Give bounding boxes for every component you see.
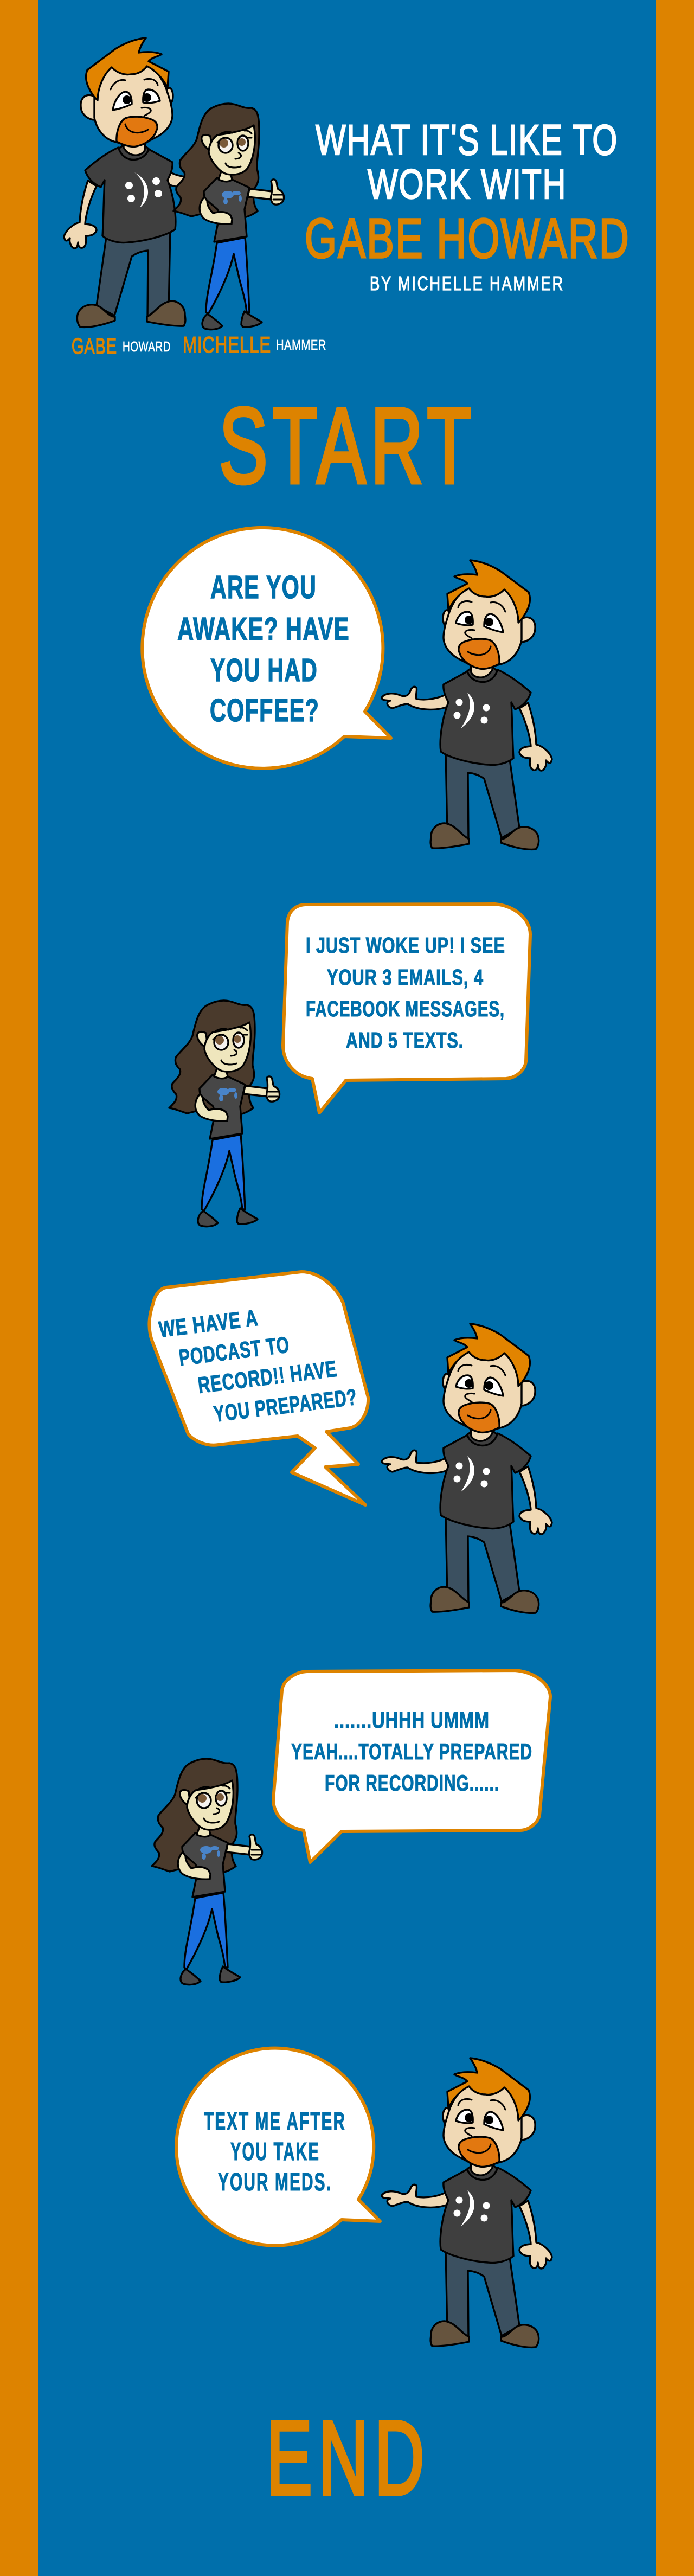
speech bubble 2: I JUST WOKE UP! I SEE [306,933,505,958]
header illustration: Gabe [64,38,234,327]
Gabe character 3 [382,2058,552,2347]
speech bubble 3: YOU PREPARED? [212,1384,358,1427]
Gabe character 2 [382,1324,552,1613]
START heading: START [219,386,477,505]
speech bubble 5: TEXT ME AFTER [204,2107,346,2135]
speech bubble 4 [273,1670,550,1862]
title: WORK WITH [368,161,567,208]
speech bubble 5 [176,2048,380,2246]
Michelle character 1 [169,1001,280,1227]
Michelle character 2 [152,1759,262,1985]
speech bubble 1: YOU HAD [210,652,318,688]
speech bubble 2 [283,904,530,1113]
caption: Gabe Howard: HOWARD [123,338,171,355]
title: BY MICHELLE HAMMER [370,272,564,294]
speech bubble 3: WE HAVE A [157,1305,260,1342]
speech bubble 4: .......UHHH UMMM [334,1707,490,1733]
left orange band [0,0,38,2576]
speech bubble 1: COFFEE? [210,693,319,728]
speech bubble 2: AND 5 TEXTS. [346,1028,464,1053]
speech bubble 3: PODCAST TO [177,1331,291,1370]
speech bubble 4: YEAH....TOTALLY PREPARED [291,1739,532,1764]
caption: Michelle Hammer: HAMMER [276,337,326,353]
speech bubble 4: FOR RECORDING...... [325,1770,499,1796]
speech bubble 2: YOUR 3 EMAILS, 4 [327,965,484,990]
caption: Michelle Hammer: MICHELLE [183,332,271,357]
caption: Gabe Howard: GABE [72,334,117,358]
speech bubble 3: RECORD!! HAVE [196,1356,338,1398]
END heading: END [266,2399,430,2517]
right orange band [656,0,694,2576]
speech bubble 5: YOU TAKE [230,2137,320,2165]
Gabe character 1 [382,560,552,849]
caption: Gabe Howard [72,334,171,358]
speech bubble 1: ARE YOU [210,569,317,605]
speech bubble 1 [142,528,391,768]
speech bubble 5: YOUR MEDS. [218,2168,332,2196]
title [305,116,630,294]
speech bubble 1: AWAKE? HAVE [177,611,350,647]
header illustration: Michelle [174,104,284,330]
speech bubble 2: FACEBOOK MESSAGES, [306,996,505,1021]
speech bubble 3 [149,1272,368,1505]
